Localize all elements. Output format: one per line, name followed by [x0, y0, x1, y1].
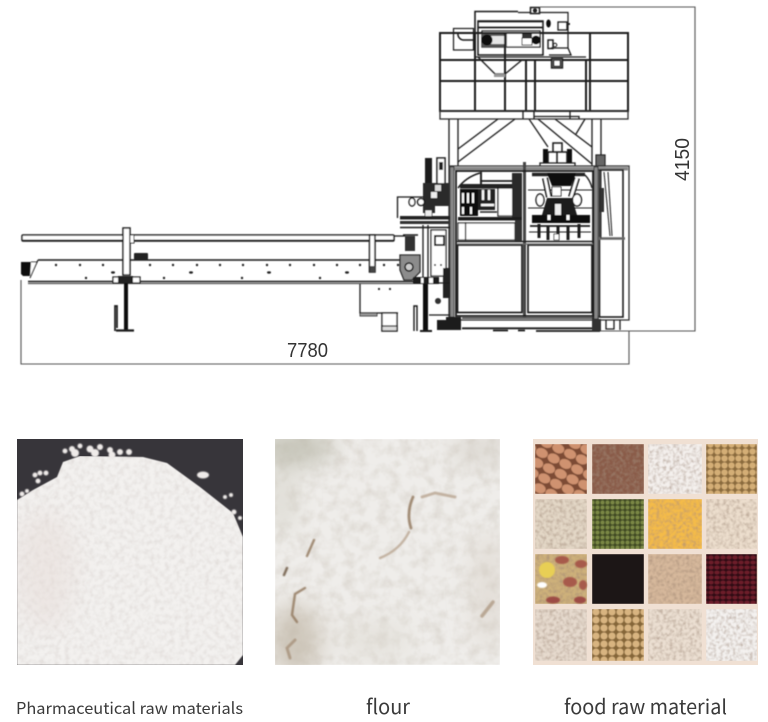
dimension lines [21, 7, 695, 364]
platform deck [440, 111, 628, 119]
motor and gearbox [405, 236, 415, 251]
small motor [134, 253, 148, 260]
left chamber mechanism [458, 172, 522, 241]
upper hopper platform [440, 8, 628, 119]
mixed bean accents [537, 556, 587, 604]
conveyor [21, 228, 413, 331]
right chamber mechanism [528, 173, 592, 240]
control box [431, 230, 446, 276]
top scale housing [454, 8, 571, 55]
platform grid [440, 33, 628, 111]
lower left panel [458, 245, 522, 312]
handle [414, 306, 417, 331]
dark drive assembly [423, 183, 449, 213]
dimension: height 4150: 4150 [672, 138, 694, 181]
photo: flour [275, 439, 500, 665]
horizontal belt [400, 216, 450, 220]
tall upper columns [425, 158, 432, 184]
weighing and forming equipment at top of lower frame [540, 143, 605, 166]
flour shading [275, 439, 500, 665]
side packing unit [398, 158, 461, 331]
right post [370, 235, 375, 272]
caption: flour: flour [366, 691, 410, 720]
frame uprights [449, 166, 629, 320]
powder pile [17, 456, 243, 665]
hopper [478, 57, 562, 77]
caption: pharmaceutical raw materials: Pharmaceutical raw materials [16, 695, 243, 719]
lower cabinet wall [429, 283, 450, 315]
powder shading [17, 522, 68, 618]
support legs and braces [449, 119, 601, 166]
lower right panel [528, 245, 592, 312]
conveyor head roller [21, 262, 31, 276]
vertical shaft [423, 225, 428, 283]
stray granules [20, 444, 242, 520]
caption: food raw material: food raw material [564, 691, 727, 720]
lower machine frame [449, 162, 629, 331]
left bracket and rollers [398, 197, 424, 218]
photo: pharmaceutical raw material powder [15, 439, 243, 665]
machine technical drawing [21, 7, 695, 364]
conveyor support box [360, 284, 398, 331]
left post [113, 228, 140, 331]
conveyor belt [28, 260, 413, 282]
grain cells [535, 444, 757, 661]
flour texture [275, 439, 500, 665]
transfer block squares [413, 277, 439, 284]
flour cracks [284, 493, 493, 658]
top guide rail [22, 235, 394, 241]
photo: food raw material grain box [533, 439, 758, 665]
belt holes [55, 264, 399, 279]
dimension: length 7780: 7780 [287, 340, 328, 362]
base motor [437, 317, 461, 330]
